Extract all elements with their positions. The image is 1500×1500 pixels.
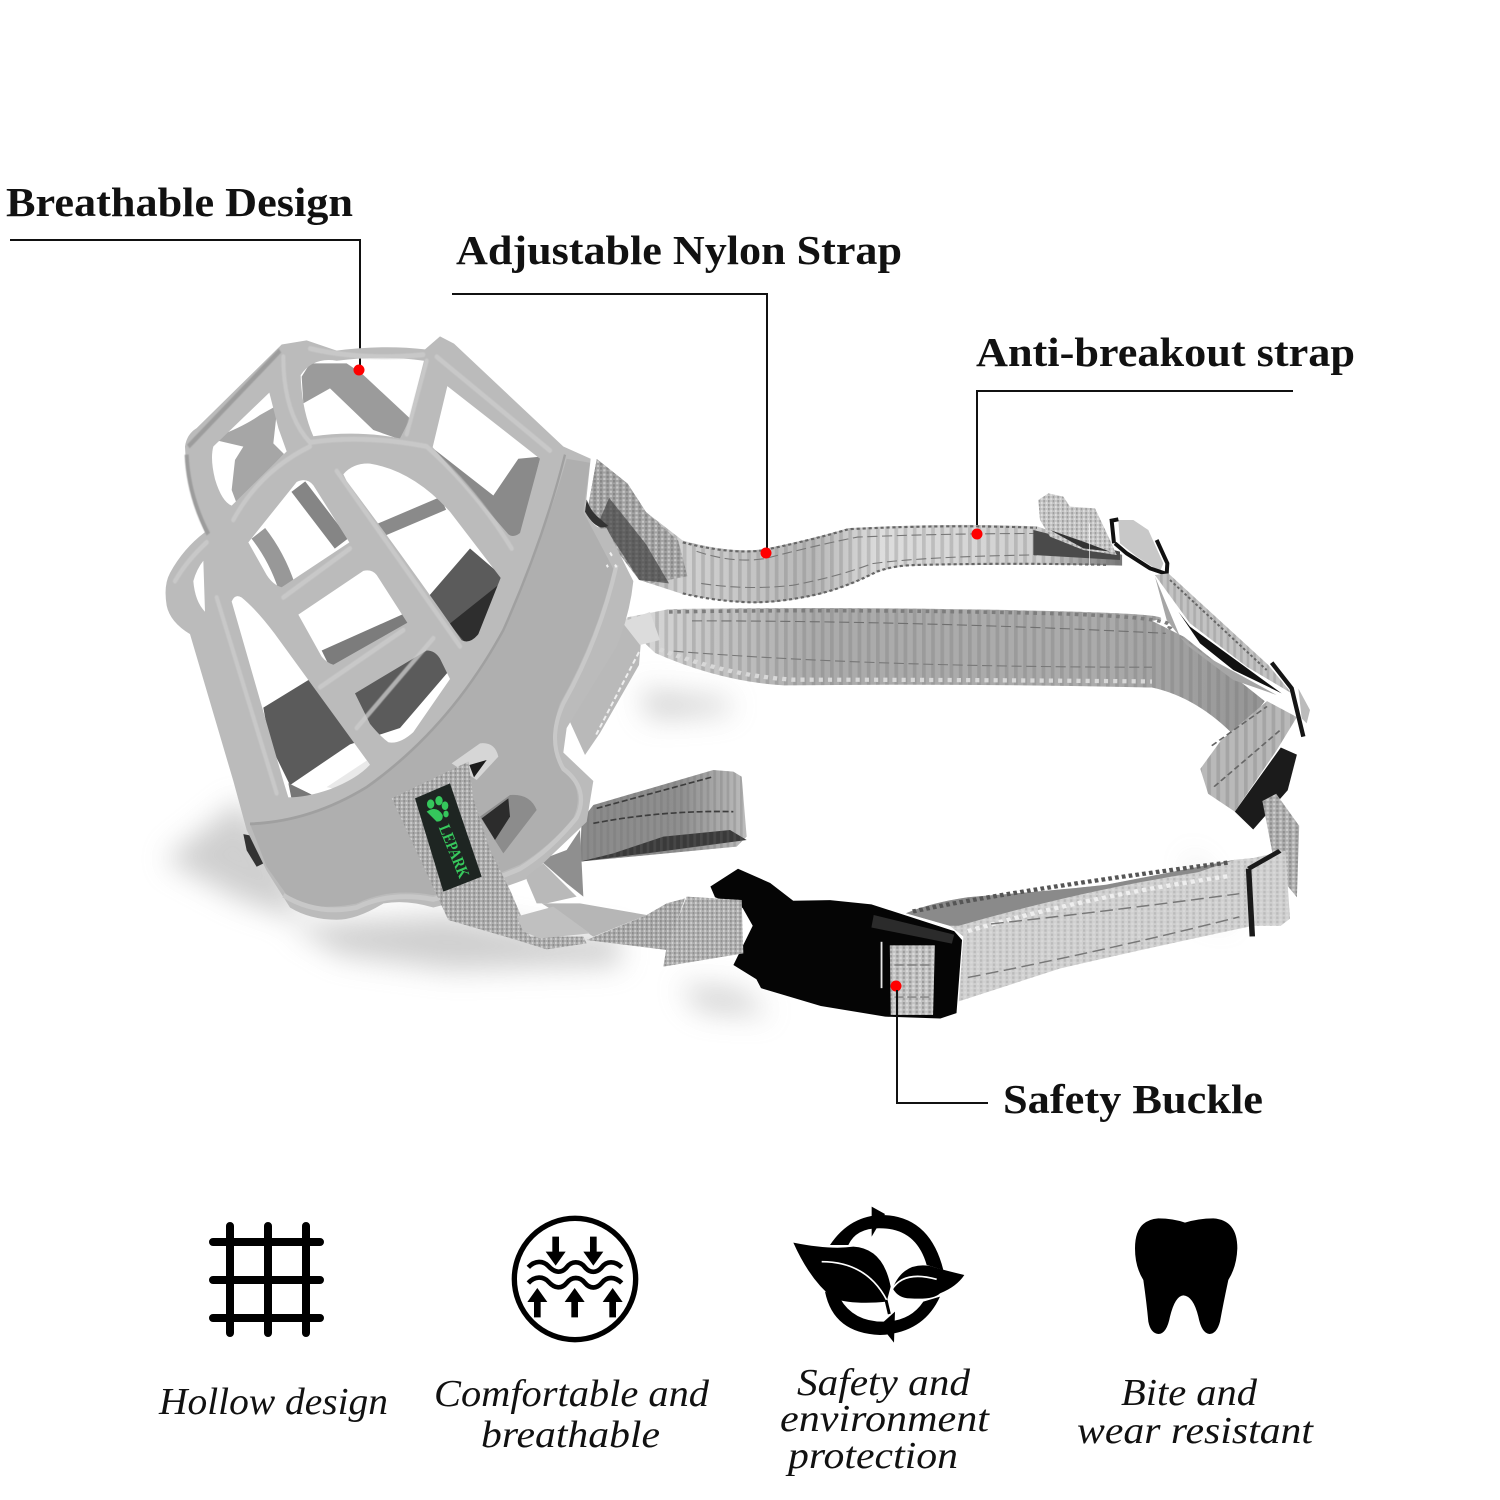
rear bars of cage seen through openings (215, 363, 443, 587)
D-ring (1272, 663, 1303, 737)
middle wide strap (623, 608, 1265, 739)
title label: Breathable Design: Breathable Design (6, 179, 353, 225)
icon: leaf and recycling arrows (793, 1207, 964, 1343)
caption: Safety and environment protection: protection (785, 1435, 958, 1477)
caption: Hollow design: Hollow design (158, 1381, 388, 1423)
caption: Safety and environment protection (780, 1362, 991, 1477)
icon: hollow grid (213, 1226, 320, 1333)
title label: Adjustable Nylon Strap: Adjustable Nylon Strap (456, 227, 902, 273)
icon: breathable circle (514, 1218, 636, 1340)
shadows under the product (165, 690, 1230, 1015)
free strap end, pad and knot under muzzle (540, 770, 747, 950)
safety buckle (710, 869, 962, 1018)
slider (1112, 519, 1167, 574)
inside of cage seen through openings (243, 447, 541, 867)
slot two (480, 795, 537, 853)
icon: tooth (1135, 1218, 1237, 1334)
title label: Anti-breakout strap: Anti-breakout strap (976, 329, 1355, 375)
title label: Breathable Design (6, 179, 360, 370)
caption: Comfortable and breathable: breathable (481, 1414, 660, 1456)
label: Safety Buckle: Safety Buckle (1003, 1076, 1263, 1122)
lower strap (906, 851, 1290, 1001)
cage rib highlights (175, 349, 550, 793)
pad behind mid strap (560, 612, 660, 755)
caption: Comfortable and breathable: Comfortable and (434, 1373, 710, 1415)
strap section under the loop (1033, 530, 1120, 560)
collar surface (250, 459, 613, 907)
caption: Bite and wear resistant: Bite and (1121, 1372, 1258, 1414)
strap behind collar (540, 830, 583, 897)
slot one (452, 743, 498, 780)
woven tab (392, 762, 587, 949)
anti-breakout loop, slider and right strap section (1033, 493, 1310, 737)
strap loop (1038, 493, 1117, 565)
caption: Safety and environment protection: environment (780, 1398, 991, 1440)
lower chin pad (517, 907, 590, 938)
title label: Adjustable Nylon Strap (452, 227, 902, 553)
black gap (1178, 612, 1282, 693)
strap knot left of buckle (663, 897, 743, 967)
upper nylon strap (587, 459, 1122, 603)
neck pad (542, 903, 647, 937)
short free strap end (580, 770, 747, 862)
caption: Bite and wear resistant: wear resistant (1077, 1410, 1315, 1452)
straps and buckle (587, 459, 1299, 1018)
caption: Safety and environment protection: Safety and (797, 1362, 971, 1404)
label: Safety Buckle (897, 990, 1263, 1122)
top layer of right strap (1155, 573, 1292, 693)
text: LEPARK brand label: LEPARK (435, 822, 474, 881)
collar slots, brand tab and label (392, 743, 743, 967)
silicone cage and collar (166, 336, 633, 920)
twisted strap (587, 898, 685, 950)
back layer of right strap (1155, 577, 1277, 695)
upper chin pad (527, 863, 577, 903)
muzzle (166, 336, 633, 920)
collar edge shading (250, 455, 565, 824)
caption: Comfortable and breathable (434, 1373, 710, 1456)
left rim shading (187, 351, 280, 534)
caption: Bite and wear resistant (1077, 1372, 1315, 1452)
folded strap with dark lining (1200, 701, 1299, 897)
title label: Anti-breakout strap (976, 329, 1355, 534)
icon: green paw (427, 796, 449, 822)
label patch (415, 783, 482, 892)
red marker dots (354, 364, 982, 992)
